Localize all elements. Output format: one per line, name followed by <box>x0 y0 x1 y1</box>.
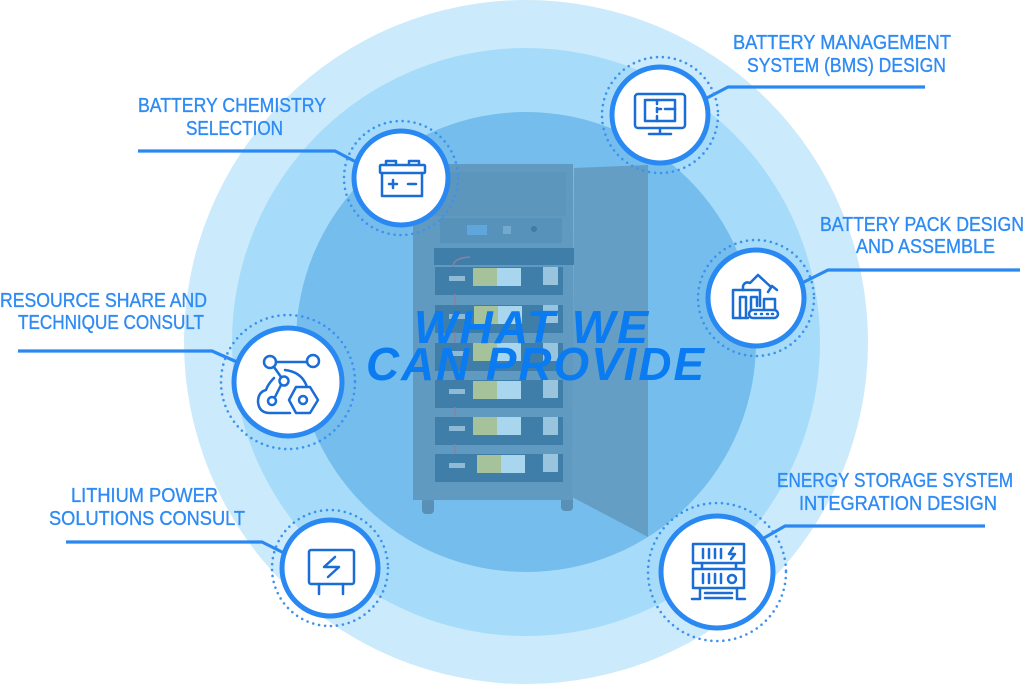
item: energy storage system integration design <box>648 470 1013 641</box>
title <box>366 301 706 390</box>
item: resource share and technique consult <box>0 290 355 449</box>
battery modules <box>434 248 574 482</box>
item: battery management system design <box>602 32 951 173</box>
label: AND ASSEMBLE <box>856 236 995 258</box>
label <box>777 470 1013 515</box>
label <box>0 290 207 334</box>
label: SELECTION <box>186 118 283 140</box>
dotted ring <box>272 510 388 626</box>
white disc <box>661 516 773 628</box>
label: RESOURCE SHARE AND <box>0 290 207 312</box>
white disc <box>612 67 708 163</box>
item: battery chemistry selection <box>138 95 458 235</box>
dotted ring <box>602 57 718 173</box>
label: BATTERY MANAGEMENT <box>733 32 951 54</box>
leader line <box>138 151 358 163</box>
label <box>49 485 245 530</box>
label: BATTERY CHEMISTRY <box>138 95 326 117</box>
cabinet door <box>572 165 648 537</box>
item: battery pack design and assemble <box>698 214 1024 356</box>
icon: energy storage rack <box>692 544 745 599</box>
label <box>820 214 1024 258</box>
leader line <box>802 270 1020 283</box>
cabinet body <box>413 164 573 500</box>
controller unit <box>440 218 562 243</box>
dotted ring <box>648 503 786 641</box>
item: lithium power solutions consult <box>49 485 388 626</box>
leader line <box>705 87 925 99</box>
white disc <box>354 131 448 225</box>
dotted ring <box>344 121 458 235</box>
label: INTEGRATION DESIGN <box>799 493 997 515</box>
leader line <box>18 351 237 362</box>
label: LITHIUM POWER <box>71 485 218 507</box>
icon: car battery <box>380 161 425 196</box>
title: CAN PROVIDE <box>366 338 706 390</box>
cabinet wheels <box>422 496 573 514</box>
cabinet top shelf <box>432 172 566 216</box>
label: SYSTEM (BMS) DESIGN <box>747 55 946 77</box>
concentric background circles <box>184 0 868 684</box>
white disc <box>234 328 342 436</box>
icon: nodes and gear <box>258 355 319 413</box>
icon: robot arm assembly line <box>733 275 778 318</box>
battery cabinet photo <box>413 164 648 537</box>
leader line <box>764 526 985 538</box>
label <box>138 95 326 140</box>
dotted ring <box>221 315 355 449</box>
icon: power board <box>309 550 354 594</box>
label: TECHNIQUE CONSULT <box>18 312 204 334</box>
label: SOLUTIONS CONSULT <box>49 508 245 530</box>
white disc <box>282 520 378 616</box>
title: WHAT WE <box>414 301 650 353</box>
white disc <box>708 250 804 346</box>
leader line <box>66 542 286 554</box>
label <box>733 32 951 77</box>
icon: monitor with circuit <box>635 94 685 134</box>
dotted ring <box>698 240 814 356</box>
